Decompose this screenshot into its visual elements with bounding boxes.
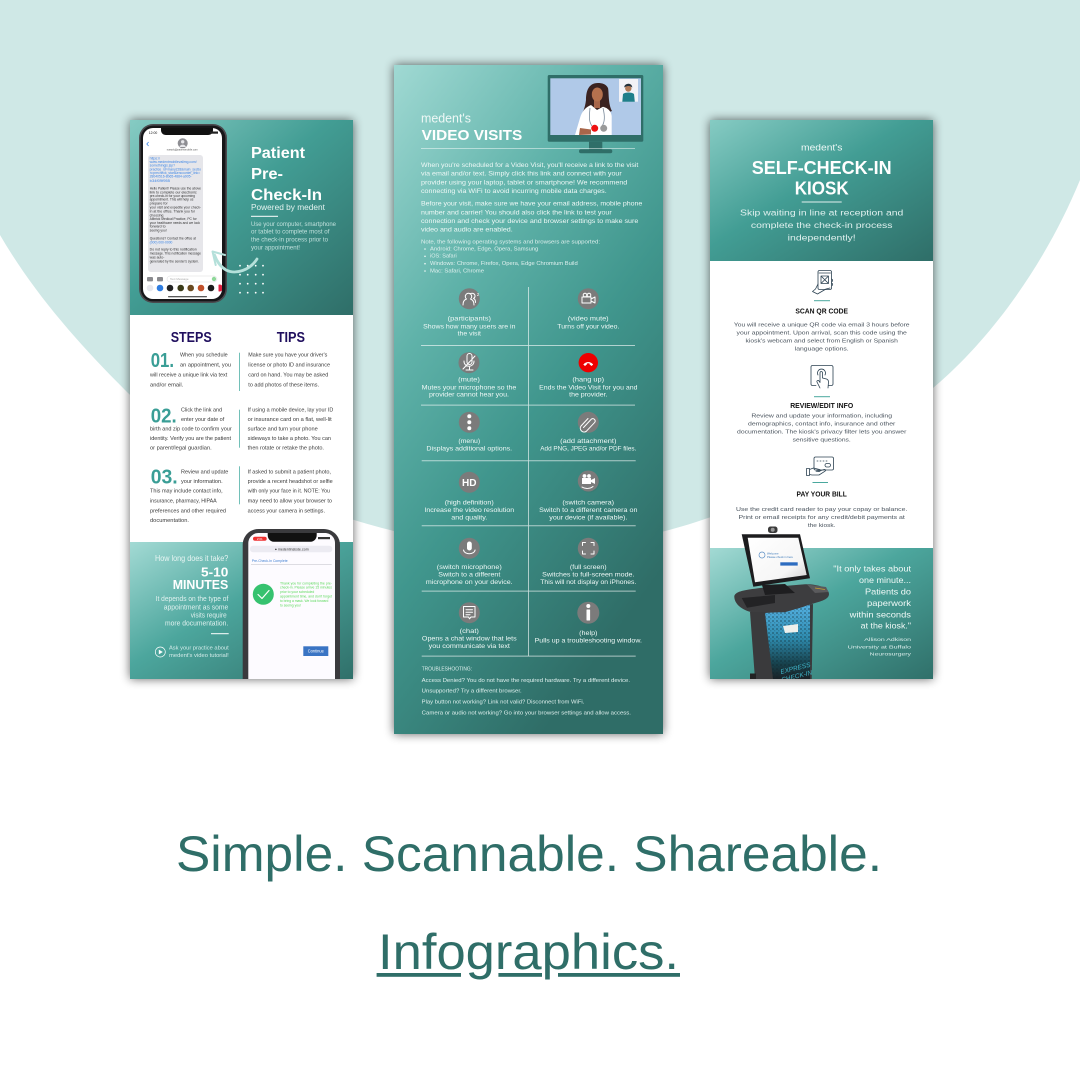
icon: phone with text message: somethingjs.jsp?: [150, 164, 175, 168]
cell: full screen: [540, 538, 637, 586]
list: supported browsers: Android: Chrome, Edge, Opera, Samsung: [430, 246, 539, 252]
icon: phone with text message: seeing you!: [150, 229, 167, 233]
cell: add attachment: (add attachment): [560, 438, 616, 445]
cell: add attachment: [540, 412, 637, 452]
headline: infographics with underline: Infographics.: [378, 924, 679, 980]
text block: how long does it take: visits require: [191, 612, 227, 619]
section: pay your bill: Print or email receipts for any credit/debit payments at: [739, 515, 905, 521]
cell: help: (help): [579, 630, 597, 637]
icon: phone with text message: your healthcare needs and we look: [150, 221, 200, 225]
cell: participants: (participants): [448, 316, 491, 323]
icon: monitor with doctor: [548, 75, 643, 153]
heading: video visits: VIDEO VISITS: [422, 127, 522, 144]
text block: kiosk intro: complete the check-in process: [751, 221, 893, 230]
section: pay your bill: the kiosk.: [808, 523, 836, 529]
heading: patient pre-check-in: Check-In: [251, 187, 322, 204]
section: scan qr code: kiosk's webcam and select from English or Spanish: [746, 339, 898, 345]
illustration: check-in kiosk: Please check in here: [767, 555, 793, 559]
icon: phone with text message: https://: [150, 156, 160, 160]
heading: steps: STEPS: [171, 330, 212, 346]
section: scan qr code: You will receive a unique QR code via email 3 hours before: [734, 322, 910, 328]
cell: switch microphone: [426, 538, 513, 586]
icon: phone with text message: n=precheck_start&encounter_link=: [150, 171, 200, 175]
icon: phone with text message: your visit and expedite your check-: [150, 206, 201, 210]
icon: phone with text message: practice_id=many228&main_sectio: [150, 167, 201, 171]
section: review/edit info: [737, 366, 907, 444]
cell: switch microphone: (switch microphone): [437, 564, 502, 571]
cell: high definition: Increase the video resolution: [424, 507, 515, 514]
icon: phone with text message: choosing: [150, 213, 164, 217]
heading: self-check-in kiosk: [752, 143, 892, 202]
icon: phone with text message: [139, 124, 227, 303]
illustration: check-in kiosk: CHECK-IN: [781, 669, 813, 684]
step 2: birth and zip code to confirm your: [150, 427, 232, 433]
quote: Neurosurgery: [870, 652, 912, 657]
step 2: Click the link and: [181, 407, 222, 413]
step 1: 01.: [151, 350, 174, 372]
cell: switch microphone: microphone on your device.: [426, 579, 513, 586]
list: supported browsers: [421, 239, 600, 274]
cell: mute: Mutes your microphone so the: [422, 384, 517, 391]
tips text: or insurance card on a flat, well-lit: [248, 417, 332, 423]
text block: troubleshooting: Unsupported? Try a different browser.: [422, 689, 522, 695]
step 1: will receive a unique link via text: [149, 373, 228, 379]
section: scan qr code: [734, 270, 910, 353]
icon: phone with confirmation screen: ● medentinsisde.com: [275, 547, 309, 551]
tips text: If asked to submit a patient photo,: [248, 469, 332, 475]
step 3: your information.: [181, 479, 223, 485]
icon: phone with confirmation screen: to bring a mask. We look forward: [280, 599, 328, 603]
text block: troubleshooting: Camera or audio not working? Go into your browser settings and allow access.: [422, 711, 631, 717]
icon: phone with confirmation screen: prior to your scheduled: [280, 590, 314, 594]
text block: intro: Use your computer, smartphone: [251, 222, 337, 228]
tips text: license or photo ID and insurance: [248, 363, 330, 369]
cell: video mute: [557, 288, 620, 330]
cell: high definition: and quality.: [451, 514, 488, 521]
icon: phone with confirmation screen: Pre-Check-In Complete: [252, 559, 288, 563]
icon: phone with text message: Text Message: [170, 277, 189, 281]
cell: chat: you communicate via text: [429, 643, 510, 650]
cell: video mute: Turns off your video.: [557, 323, 620, 330]
step 3: This may include contact info,: [150, 489, 223, 495]
cell: participants: [423, 288, 516, 338]
text block: introduction: provider using your laptop, tablet or smartphone! We recommend: [421, 179, 628, 186]
tips text: surface and turn your phone: [248, 427, 318, 433]
tips text: access your camera in settings.: [248, 508, 325, 514]
text block: intro: the check-in process prior to: [251, 238, 329, 244]
icon: phone with text message: 28040516-8b65-4884-a905-: [150, 175, 192, 179]
cell: chat: [422, 602, 517, 650]
list: supported browsers: iOS: Safari: [430, 254, 457, 260]
text block: how long does it take: 5-10: [201, 565, 228, 580]
step 3: preferences and other required: [150, 508, 226, 514]
text block: troubleshooting: [422, 667, 631, 717]
text block: how long does it take: [155, 554, 229, 634]
tips text: Make sure you have your driver's: [248, 353, 328, 359]
section: review/edit info: sensitive questions.: [793, 438, 851, 444]
cell: mute: (mute): [458, 377, 480, 384]
text block: introduction: connecting via WiFi to avoid incurring mobile data charges.: [421, 188, 607, 195]
heading: patient pre-check-in: Powered by medent: [251, 202, 326, 212]
heading: video visits: [421, 111, 635, 149]
dot grid decoration: [239, 265, 264, 294]
section: review/edit info: documentation. The kiosk's privacy filter lets you answer: [737, 430, 907, 436]
text block: introduction: connection and check your device and browser settings to make sure: [421, 218, 639, 225]
tips text: If using a mobile device, lay your ID: [248, 407, 333, 413]
step 1: When you schedule: [180, 353, 228, 359]
illustration: check-in kiosk: Welcome: [767, 552, 779, 556]
tips text: sideways to take a photo. You can: [248, 436, 331, 442]
section: pay your bill: Use the credit card reader to pay your copay or balance.: [736, 507, 907, 513]
text block: video tutorial: Ask your practice about: [169, 646, 229, 652]
section: review/edit info: REVIEW/EDIT INFO: [790, 403, 854, 410]
tips text: to add photos of these items.: [248, 382, 319, 388]
tips text: [247, 353, 333, 514]
text block: intro: [251, 222, 337, 252]
text block: troubleshooting: TROUBLESHOOTING:: [422, 667, 472, 673]
cell: full screen: (full screen): [570, 564, 607, 571]
icon: phone with qr code: [812, 270, 833, 294]
cell: participants: 2: [477, 292, 480, 297]
heading: self-check-in kiosk: KIOSK: [795, 177, 849, 198]
text block: introduction: When you're scheduled for a Video Visit, you'll receive a link to the visit: [421, 162, 639, 169]
panel: patient pre-check-in infographic: [130, 120, 353, 679]
text block: how long does it take: MINUTES: [173, 577, 229, 592]
step 3: 03.: [151, 466, 178, 488]
cell: menu: [426, 412, 512, 452]
cell: high definition: [424, 472, 515, 521]
step 3: documentation.: [150, 518, 189, 524]
icon: phone with text message: generated by the sender's system.: [150, 259, 199, 263]
icon: phone with text message: in at the office. Thank you for: [150, 210, 196, 214]
section: pay your bill: [736, 457, 907, 529]
text block: kiosk intro: Skip waiting in line at reception and: [740, 209, 903, 218]
step 3: insurance, pharmacy, HIPAA: [150, 498, 217, 504]
icon: touch screen: [811, 366, 833, 388]
icon: phone with text message: (000) 000-0000: [150, 240, 173, 244]
cell: switch camera: [539, 470, 638, 521]
cell: switch camera: (switch camera): [562, 499, 614, 506]
heading: patient pre-check-in: [251, 145, 326, 217]
icon: phone with text message: Allbrick Medical Practice, PC for: [150, 217, 198, 221]
cell: add attachment: Add PNG, JPEG and/or PDF files.: [540, 445, 637, 452]
text block: intro: your appointment!: [251, 246, 300, 252]
quote: within seconds: [849, 610, 911, 619]
cell: participants: Shows how many users are in: [423, 323, 516, 330]
heading: patient pre-check-in: Pre-: [251, 166, 283, 183]
quote: one minute...: [859, 576, 911, 585]
text block: video tutorial: [169, 646, 229, 659]
icon: phone with text message: prepare for: [150, 202, 169, 206]
step 2: 02.: [151, 405, 177, 427]
cell: menu: Displays additional options.: [426, 445, 512, 452]
icon: phone with confirmation screen: check-in. Please arrive 15 minutes: [280, 585, 332, 589]
text block: how long does it take: appointment as some: [164, 604, 228, 611]
text block: how long does it take: How long does it take?: [155, 554, 229, 563]
panel: video visits infographic: [394, 65, 663, 734]
tips text: then rotate or retake the photo.: [248, 445, 324, 451]
arrow: curved pointer to phone: [212, 252, 257, 272]
cell: mute: provider cannot hear you.: [429, 392, 509, 399]
quote: Patients do: [865, 587, 911, 596]
section: scan qr code: your appointment. Upon arrival, scan this code using the: [737, 330, 907, 336]
step 2: enter your date of: [181, 417, 225, 423]
section: review/edit info: demographics, contact info, insurance and other: [748, 422, 896, 428]
quote: at the kiosk.": [861, 622, 911, 631]
heading: video visits: medent's: [421, 111, 471, 125]
cell: high definition: HD: [462, 478, 477, 489]
step 2: or parent/legal guardian.: [150, 445, 212, 451]
text block: kiosk intro: [740, 209, 903, 242]
step 1: and/or email.: [150, 382, 183, 388]
background: pale teal curved shape: [0, 0, 1080, 548]
cell: hang up: the provider.: [569, 392, 608, 399]
cell: chat: Opens a chat window that lets: [422, 636, 517, 643]
list: supported browsers: Note, the following operating systems and browsers are supported:: [421, 239, 600, 245]
quote: University at Buffalo: [848, 644, 912, 649]
cell: hang up: [539, 353, 638, 399]
cell: video mute: (video mute): [568, 316, 609, 323]
list: supported browsers: Windows: Chrome, Firefox, Opera, Edge Chromium Build: [430, 261, 578, 267]
step 3: Review and update: [181, 469, 228, 475]
tips text: card on hand. You may be asked: [248, 373, 328, 379]
heading: tips: TIPS: [277, 330, 305, 346]
headline: simple scannable shareable: Simple. Scannable. Shareable.: [176, 826, 882, 882]
text block: how long does it take: It depends on the type of: [156, 596, 228, 603]
step 1: [149, 350, 231, 388]
cell: full screen: Switches to full-screen mode.: [542, 572, 635, 579]
quote: paperwork: [867, 599, 912, 608]
icon: phone with text message: 12:00: [149, 131, 157, 135]
text block: how long does it take: more documentation.: [165, 621, 228, 628]
icon: phone with text message: www.medentmobilevalimg.com/: [150, 160, 197, 164]
icon: phone with confirmation screen: appointment time, and don't forget: [280, 595, 332, 599]
section: pay your bill: PAY YOUR BILL: [797, 492, 848, 499]
text block: introduction: via email and/or text. Simply click this link and connect with your: [421, 171, 623, 178]
panel: self-check-in kiosk infographic: [710, 120, 933, 684]
icon: phone with confirmation screen: to seeing you!: [280, 603, 301, 607]
cell: full screen: This will not display on iPhones.: [540, 579, 637, 586]
icon: phone with text message: Do not reply to this notification: [150, 247, 197, 251]
illustration: check-in kiosk: EXPRESS: [780, 662, 812, 676]
heading: self-check-in kiosk: SELF-CHECK-IN: [752, 157, 892, 178]
quote: [833, 565, 912, 657]
icon: phone with confirmation screen: Continue: [308, 649, 324, 654]
icon: phone with text message: message. This notification message: [150, 251, 201, 255]
section: scan qr code: SCAN QR CODE: [795, 309, 848, 316]
cell: help: Pulls up a troubleshooting window.: [535, 637, 642, 644]
icon: phone with text message: was auto-: [150, 255, 164, 259]
cell: chat: (chat): [460, 628, 479, 635]
cell: switch camera: your device (if available).: [549, 514, 628, 521]
heading: patient pre-check-in: Patient: [251, 145, 305, 162]
icon: phone with text message: link to complete our electronic: [150, 190, 197, 194]
text block: troubleshooting: Access Denied? You do not have the required hardware. Try a different device.: [422, 678, 630, 684]
step 2: identity. Verify you are the patient: [150, 436, 232, 442]
step 2: [150, 405, 232, 451]
illustration: check-in kiosk: [734, 526, 829, 684]
text block: troubleshooting: Play button not working? Link not valid? Disconnect from WiFi.: [422, 700, 584, 706]
icon: phone with text message: forward to: [150, 225, 166, 229]
step 1: an appointment, you: [180, 363, 231, 369]
icon: play button: [155, 647, 165, 657]
text block: introduction: number and carrier! You should also click the link to test your: [421, 209, 613, 216]
step 3: [150, 466, 228, 524]
cell: hang up: (hang up): [572, 377, 604, 384]
text block: introduction: video and audio are enabled.: [421, 227, 513, 234]
cell: participants: the visit: [458, 331, 481, 338]
tips text: with only your face in it. NOTE: You: [247, 489, 330, 495]
cell: hang up: Ends the Video Visit for you and: [539, 384, 638, 391]
cell: mute: [422, 352, 517, 399]
icon: phone with text message: appointment. This will help us: [150, 198, 194, 202]
icon: hand holding credit card: [806, 457, 834, 476]
tips text: provide a recent headshot or selfie: [248, 479, 333, 485]
icon: phone with text message: Questions? Contact the office at: [150, 236, 196, 240]
icon: phone with text message: Hello Patient! Please use the above: [150, 187, 201, 191]
icon: phone with confirmation screen: Thank you for completing the pre-: [280, 581, 333, 585]
cell: menu: (menu): [458, 438, 480, 445]
tips text: may need to allow your browser to: [248, 498, 332, 504]
cell: switch microphone: Switch to a different: [438, 572, 501, 579]
icon: phone with text message: pre-check-in for your upcoming: [150, 194, 195, 198]
icon: phone with confirmation screen: 2:01: [257, 537, 263, 541]
list: supported browsers: Mac: Safari, Chrome: [430, 268, 484, 274]
icon: phone with confirmation screen: [243, 529, 340, 679]
text block: kiosk intro: independently!: [788, 233, 856, 242]
text block: introduction: [421, 162, 643, 234]
icon: phone with text message: noreply@patientmobile.com: [167, 149, 198, 152]
quote: "It only takes about: [833, 565, 912, 574]
quote: Allison Adkison: [864, 637, 912, 642]
icon: phone with text message: b34f09f955: [150, 179, 170, 183]
text block: introduction: Before your visit, make sure we have your email address, mobile phone: [421, 201, 643, 208]
cell: help: [535, 602, 642, 644]
text block: video tutorial: medent's video tutorial!: [169, 653, 229, 659]
section: scan qr code: language options.: [795, 347, 849, 353]
heading: self-check-in kiosk: medent's: [801, 143, 843, 154]
cell: switch camera: Switch to a different camera on: [539, 507, 638, 514]
text block: intro: or tablet to complete most of: [251, 230, 330, 236]
cell: high definition: (high definition): [445, 499, 494, 506]
section: review/edit info: Review and update your information, including: [751, 414, 892, 420]
